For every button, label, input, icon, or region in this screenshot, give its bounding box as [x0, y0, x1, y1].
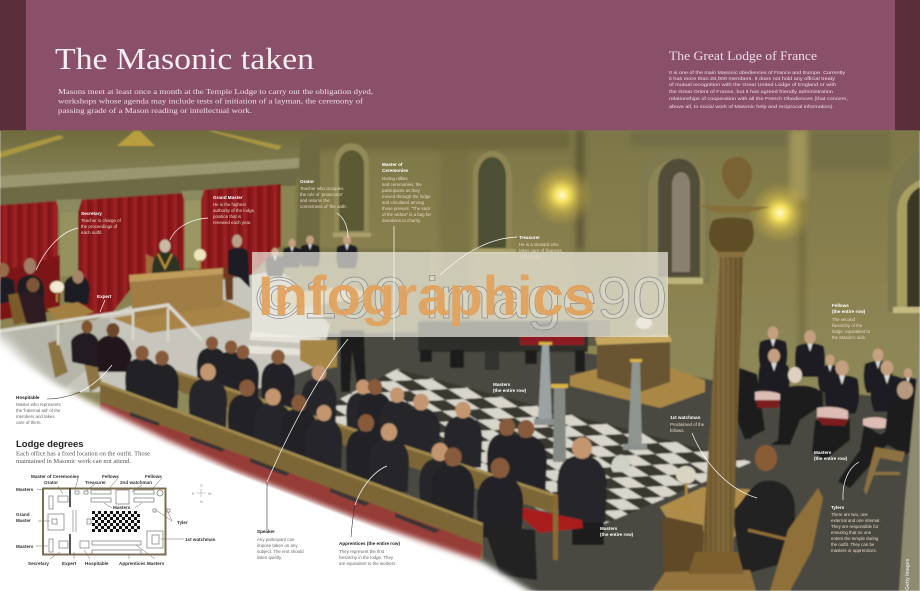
- capital urn: [722, 157, 752, 200]
- label: Master of Ceremonies: those present. "The sack: [382, 206, 431, 211]
- post behind bench: [551, 384, 568, 462]
- label: Master of Ceremonies: of the widow" is a bag for: [382, 212, 431, 217]
- middle pew: [150, 362, 558, 515]
- label: Treasurer: of the lodge.: [519, 254, 543, 259]
- standing speaker: [340, 330, 366, 392]
- label: Expert: Expert: [97, 294, 112, 299]
- pews with seated masters: [48, 320, 607, 580]
- plan labels: 2nd watchman: [120, 480, 152, 485]
- label: Grand Master: He is the highest: [213, 202, 246, 207]
- label: Master of Ceremonies: participants as they: [382, 188, 421, 193]
- capital cluster: [709, 218, 754, 252]
- plan labels: Fellows: [145, 474, 162, 479]
- plan leader lines: [36, 478, 184, 559]
- dais columns: [56, 186, 295, 276]
- label: Hospitable: the 'fraternal aid' of the: [16, 408, 61, 413]
- side text: [669, 70, 848, 109]
- window 1: [333, 143, 371, 237]
- right group of fellows: [737, 326, 919, 495]
- wall lamp left: [530, 163, 594, 227]
- entablature: [0, 130, 320, 250]
- foreground column: [652, 157, 770, 591]
- row of masters at back: [418, 322, 588, 372]
- white-haired master: [778, 367, 823, 410]
- back wall: [0, 130, 920, 430]
- label: Secretary: each outfit.: [81, 230, 102, 235]
- label: Grand Master: authority of the lodge,: [213, 208, 255, 213]
- plan labels: Fellows: [102, 474, 119, 479]
- label: 1st watchman: 1st watchman: [670, 415, 701, 420]
- window 2: [472, 151, 516, 253]
- window 3: [640, 151, 710, 284]
- label: Hospitable: care of them.: [16, 420, 42, 425]
- label: Secretary: Secretary: [81, 211, 102, 216]
- window 4: [888, 150, 920, 313]
- white fade bottom-left: [0, 352, 545, 591]
- header band: [0, 0, 920, 131]
- label: Fellows: hierarchy of the: [832, 323, 863, 328]
- compass: N: [200, 500, 203, 504]
- label: Fellows: [832, 303, 871, 340]
- plan labels: Hospitable: [85, 561, 109, 566]
- label: 1st watchman: fellows.: [670, 428, 685, 433]
- floor checkerboard: [300, 369, 752, 524]
- label: Masters front: Masters: [600, 526, 618, 531]
- plan labels: Secretary: [28, 561, 49, 566]
- wall lamp right: [748, 181, 812, 245]
- compass: W: [208, 492, 212, 496]
- compass: [192, 484, 212, 504]
- watermark overlay: [252, 252, 668, 337]
- aprons: [755, 391, 780, 403]
- row behind middle pew: [197, 336, 547, 491]
- plan labels: Master of Ceremonies: [31, 474, 79, 479]
- plan labels: Treasurer: [85, 480, 106, 485]
- label: Masters right: [814, 450, 848, 461]
- text: Lodge degrees description: maintained in Masonic work can not attend.: [16, 459, 132, 465]
- robed officers: [71, 332, 100, 368]
- lodge floor plan: [43, 488, 170, 554]
- label: Secretary: the proceedings of: [81, 224, 118, 229]
- label: Masters right: (the entire row): [814, 456, 848, 461]
- label: Tylers: the outfit. They can be: [831, 542, 875, 547]
- label: Grand Master: [213, 195, 255, 225]
- plan labels: Master: [16, 518, 31, 523]
- side text: of mutual recognition with the Great United Lodge of England or with: [669, 82, 837, 87]
- label: Master of Ceremonies: and circulated among: [382, 200, 425, 205]
- label: Grand Master: position that is: [213, 214, 242, 219]
- label: Masters back row: (the entire row): [493, 388, 527, 393]
- label: Apprentices: hierarchy in the lodge. They: [339, 555, 394, 560]
- row in front of middle pew: [125, 346, 523, 538]
- label: Orator: Teacher who occupies: [300, 186, 344, 191]
- label: Master of Ceremonies: [382, 162, 431, 223]
- lodge desk and Grand Master: [113, 240, 250, 333]
- label: Treasurer: takes care of finances: [519, 248, 563, 253]
- label: Speaker: subject. The rest should: [257, 549, 304, 554]
- label: Tylers: There are two, one: [831, 512, 868, 517]
- label: Masters back row: Masters: [493, 382, 511, 387]
- table lamp: [194, 249, 206, 261]
- plan labels: Tyler: [177, 520, 188, 525]
- label: Fellows: (the entire row): [832, 309, 866, 314]
- curtains: [0, 184, 281, 316]
- intro text: [58, 87, 373, 115]
- label: Hospitable: [16, 395, 61, 425]
- connector lines: [36, 213, 859, 505]
- seated man near desk: [224, 234, 250, 300]
- label: Grand Master: Grand Master: [213, 195, 243, 200]
- legs: [737, 395, 756, 440]
- capital plate: [697, 205, 770, 213]
- label: Apprentices: [339, 541, 400, 566]
- plan labels: Masters: [113, 505, 131, 510]
- label: Tylers: masters or apprentices.: [831, 548, 877, 553]
- label: Master of Ceremonies: During rallies: [382, 176, 408, 181]
- label: Masters front: (the entire row): [600, 532, 634, 537]
- treasurer pedestal: [300, 317, 705, 408]
- watermark overlay: ©190 image90: [256, 266, 667, 331]
- front pew: [100, 381, 483, 560]
- label: Masters front: [600, 526, 634, 537]
- compass: E: [192, 492, 195, 496]
- label: Hospitable: members and takes: [16, 414, 55, 419]
- plan labels: Masters: [16, 544, 34, 549]
- label: Master of Ceremonies: moved through the lodge: [382, 194, 431, 199]
- label: Grand Master: renewed each year.: [213, 220, 251, 225]
- label: Tylers: Tylers: [831, 505, 845, 510]
- label: Fellows: lodge, equivalent to: [832, 329, 871, 334]
- white rail: [0, 305, 202, 345]
- label: Apprentices: are equivalent to the workers.: [339, 561, 397, 566]
- label: Orator: and returns the: [300, 198, 330, 203]
- left seated group: [0, 255, 94, 325]
- heading: Lodge degrees: Lodge degrees: [16, 439, 84, 450]
- label: Orator: the role of 'prosecutor': [300, 192, 343, 197]
- label: Orator: [300, 179, 348, 209]
- label: Masters back row: [493, 382, 527, 393]
- label: 1st watchman: [670, 415, 705, 433]
- right man: [860, 393, 915, 455]
- standing figures at back: [265, 235, 372, 310]
- plan labels: Orator: [44, 480, 58, 485]
- side text: relationships of cooperation with all the French Obediences (that concern,: [669, 96, 848, 101]
- text: Lodge degrees description: Each office has a fixed location on the outfit. Those: [16, 450, 150, 458]
- label: Hospitable: Hospitable: [16, 395, 40, 400]
- label: Speaker: Speaker: [257, 529, 275, 534]
- white stairs: [0, 270, 330, 392]
- plan checkerboard: [92, 511, 140, 532]
- label: Orator: correctness of 'the oath'.: [300, 204, 348, 209]
- label: Apprentices: They represent the first: [339, 549, 385, 554]
- label: Apprentices: Apprentices (the entire row): [339, 541, 400, 546]
- side-room wall behind watermark: [250, 246, 430, 340]
- first watchman at desk: [660, 445, 823, 591]
- side text: it has more than 28,000 members. It does not hold any official treaty: [669, 76, 836, 81]
- label: Master of Ceremonies: donations to charity.: [382, 218, 421, 223]
- label: Speaker: [257, 529, 304, 560]
- label: Tylers: [831, 505, 881, 553]
- label: Fellows: The second: [832, 317, 856, 322]
- label: Secretary: Teacher in charge of: [81, 218, 122, 223]
- label: Tylers: external and one internal.: [831, 518, 881, 523]
- label: Masters right: Masters: [814, 450, 832, 455]
- text: Lodge degrees description: [16, 450, 150, 465]
- label: Master of Ceremonies: Master of: [382, 162, 403, 167]
- wall shading: pilasters and panels: [300, 130, 890, 350]
- plan labels: Apprentices Masters: [119, 561, 165, 566]
- label: Speaker: impose taken on any: [257, 543, 298, 548]
- side text: It is one of the main Masonic obediences of France and Europe. Currently: [669, 70, 846, 75]
- intro text: Masons meet at least once a month at the Temple Lodge to carry out the obligation dyed,: [58, 87, 373, 96]
- plan labels: [16, 474, 216, 566]
- label: Treasurer: [519, 235, 563, 259]
- label: Tylers: They are responsible for: [831, 524, 879, 529]
- plan labels: Expert: [62, 561, 77, 566]
- label: Speaker: listen quietly.: [257, 555, 282, 560]
- far right stone pillar: [899, 345, 920, 591]
- compass: S: [200, 484, 203, 488]
- ceremonial candle posts: [534, 342, 647, 472]
- label: Master of Ceremonies: and ceremonies, the: [382, 182, 422, 187]
- illustration: lodge interior: [0, 130, 920, 591]
- side text: above all, to social work of Masonic help and reciprocal information).: [669, 104, 834, 109]
- plan labels: 1st watchman: [185, 537, 216, 542]
- label: Fellows: the Mason's aids.: [832, 335, 866, 340]
- plan labels: Grand: [16, 512, 30, 517]
- label: 1st watchman: Proclaimed of the: [670, 422, 705, 427]
- label: Orator: Orator: [300, 179, 314, 184]
- label: Master of Ceremonies: Ceremonies: [382, 168, 409, 173]
- chairs at left: [48, 340, 68, 378]
- plan labels: Masters: [16, 487, 34, 492]
- seat of right-hand pew: [520, 507, 583, 533]
- label: Fellows: Fellows: [832, 303, 849, 308]
- label: Secretary: [81, 211, 122, 235]
- right-hand master: [557, 437, 607, 545]
- platform: [113, 300, 250, 333]
- main floor: [250, 332, 920, 591]
- title: The Masonic taken: [55, 41, 315, 76]
- intro text: passing grade of a Mason reading or intellectual work.: [58, 106, 252, 115]
- label: Speaker: Any participant can: [257, 537, 295, 542]
- credit: Getty Images: [905, 558, 911, 590]
- label: Tylers: enters the temple during: [831, 536, 879, 541]
- side text: the Great Orient of France, but it has agreed friendly administration: [669, 89, 834, 94]
- label: Hospitable: Master who represents: [16, 402, 61, 407]
- intro text: workshops whose agenda may include tests of initiation of a layman, the ceremony of: [58, 96, 364, 106]
- watermark overlay: Infographics: [258, 264, 595, 327]
- label: Tylers: ensuring that no one: [831, 530, 872, 535]
- label: Treasurer: Treasurer: [519, 235, 540, 240]
- label: Treasurer: He is a steward who: [519, 242, 559, 247]
- side heading: The Great Lodge of France: The Great Lodge of France: [669, 49, 817, 63]
